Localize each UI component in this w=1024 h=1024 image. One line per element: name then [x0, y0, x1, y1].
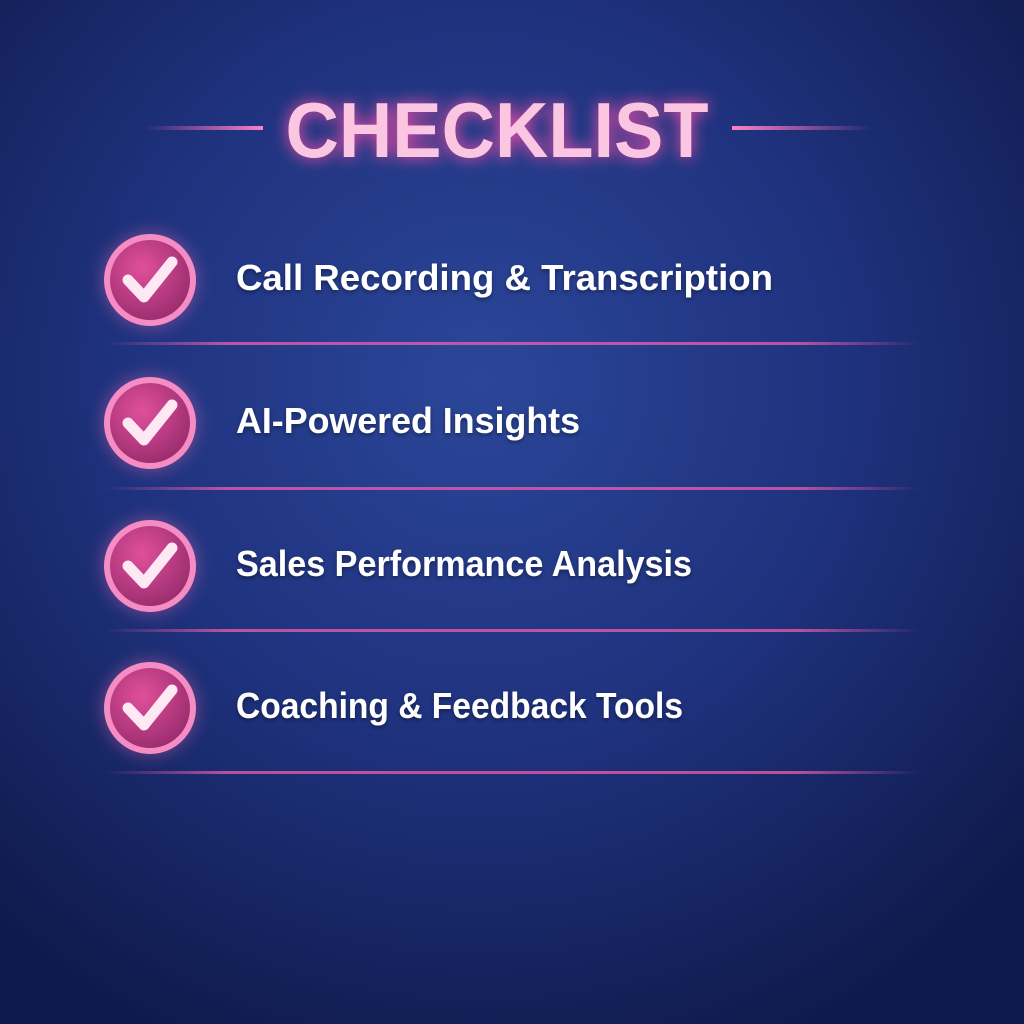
title [145, 86, 872, 174]
item 2: AI-Powered Insights [236, 400, 580, 441]
icon: check 4 [102, 660, 198, 756]
icon: check 3 [102, 518, 198, 614]
item 3: Sales Performance Analysis [236, 543, 692, 584]
icon: check 1 [102, 232, 198, 328]
icon: check 2 [102, 375, 198, 471]
item 2 [102, 375, 580, 471]
item 4: Coaching & Feedback Tools [236, 685, 683, 726]
item 3 [102, 518, 692, 614]
item 4 [102, 660, 683, 756]
item 1: Call Recording & Transcription [236, 257, 773, 298]
title: CHECKLIST [286, 86, 708, 174]
title: CHECKLIST [286, 86, 708, 174]
item 1 [102, 232, 773, 328]
